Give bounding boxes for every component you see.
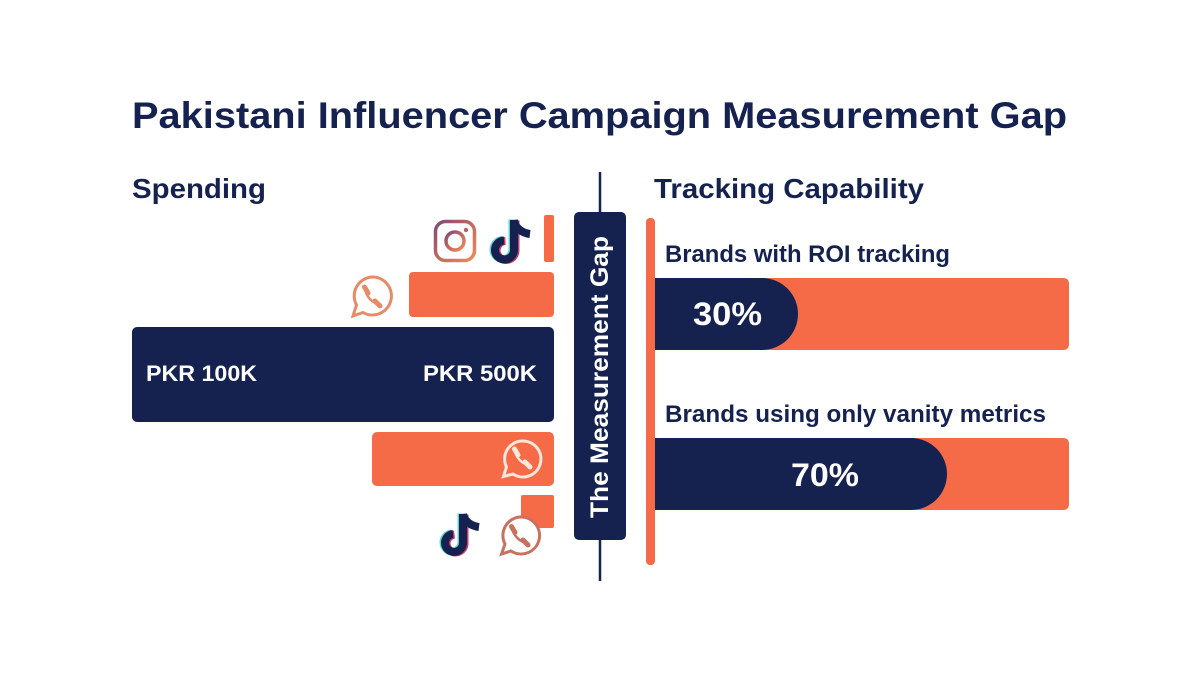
icon: tiktok bottom	[444, 514, 479, 552]
bar: 30 percent	[655, 278, 1069, 350]
panel: tracking bars	[646, 218, 1069, 565]
label: ROI tracking: Brands with ROI tracking	[665, 241, 950, 268]
divider: measurement gap	[574, 172, 626, 581]
value: 70%: 70%	[791, 457, 859, 493]
icon: tiktok top	[494, 220, 530, 260]
heading: spending: Spending	[132, 173, 266, 204]
label: PKR 100K: PKR 100K	[146, 361, 257, 386]
label: the measurement gap: The Measurement Gap	[586, 236, 614, 518]
bar: fourth with icon	[372, 432, 554, 486]
bar: 70 percent	[655, 438, 1069, 510]
bar: second	[409, 272, 554, 317]
icon: whatsapp bottom	[502, 517, 540, 554]
axis bar	[646, 218, 655, 565]
panel: spending bars	[132, 215, 554, 554]
title: Pakistani Influencer Campaign Measurement Gap	[132, 95, 1067, 136]
bar: smallest bottom	[521, 495, 554, 528]
value: 30%: 30%	[693, 296, 762, 332]
label: PKR 500K: PKR 500K	[423, 361, 537, 386]
icon: whatsapp on bar	[504, 441, 541, 477]
icon: instagram	[436, 222, 474, 260]
bar: main navy	[132, 327, 554, 422]
bar: smallest top	[544, 215, 554, 262]
icon: whatsapp outline top	[353, 277, 391, 316]
label: vanity metrics: Brands using only vanity metrics	[665, 401, 1046, 428]
heading: tracking capability: Tracking Capability	[654, 173, 924, 204]
